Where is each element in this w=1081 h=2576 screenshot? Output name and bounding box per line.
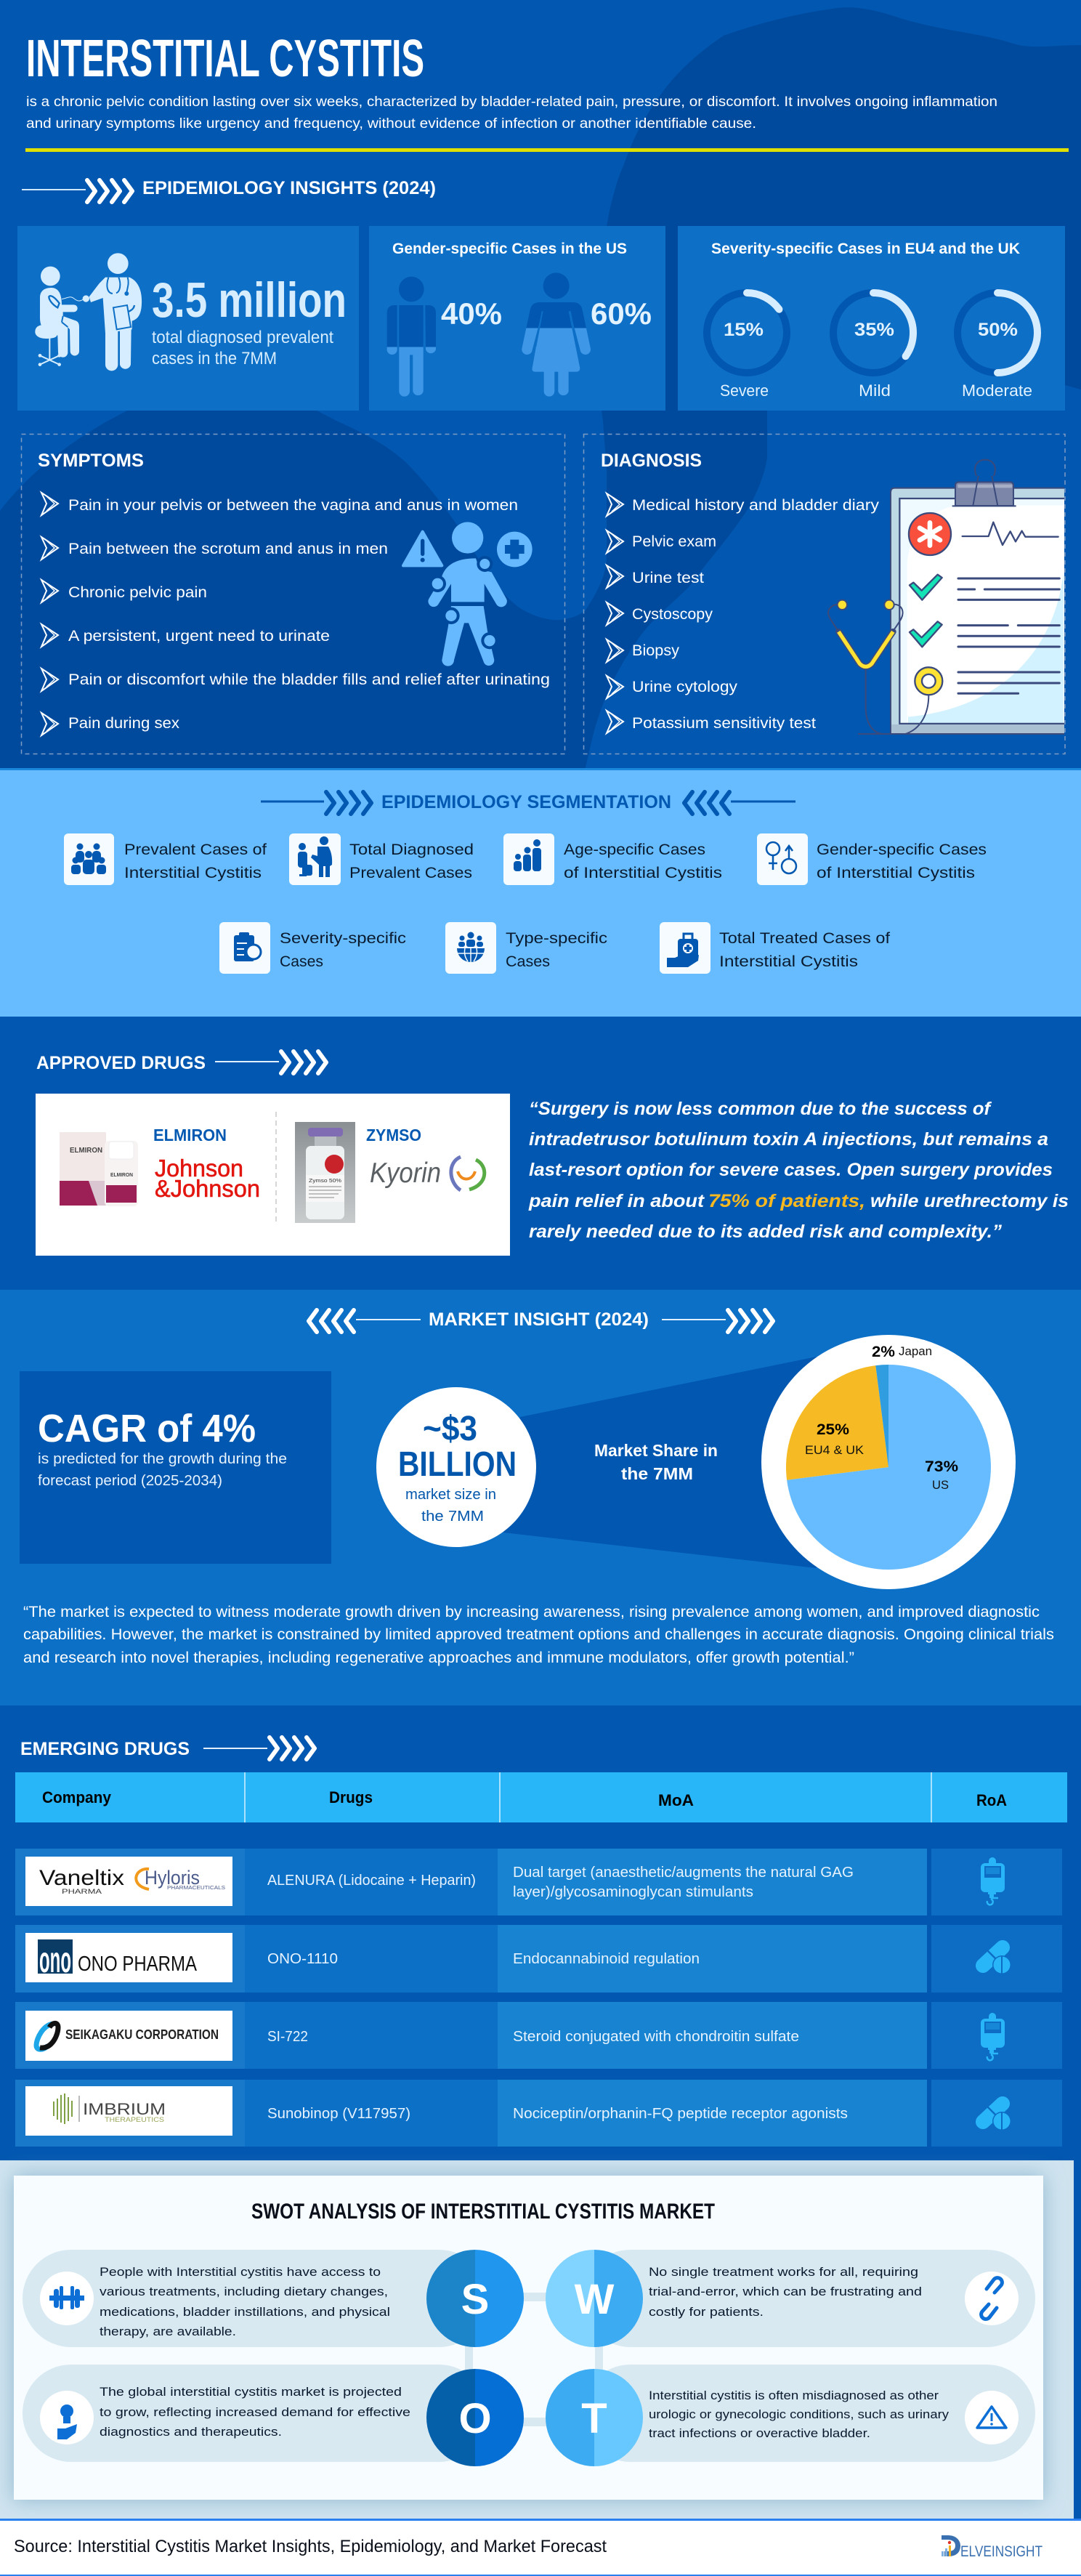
icon: pills [983,2104,1011,2131]
heading: SWOT: SWOT ANALYSIS OF INTERSTITIAL CYSTITIS MARKET [251,2200,715,2224]
strengths: medications, bladder instillations, and physical [100,2305,390,2319]
icon: IV bag [981,2013,1005,2060]
ring chart: severe [707,293,787,400]
panel: approved drugs [36,1094,510,1256]
table row: SI-722: SI-722 [267,2029,308,2045]
weaknesses: No single treatment works for all, requiring [649,2265,918,2279]
quote: surgery: 75% of patients, [708,1191,865,1211]
weaknesses [546,2250,1035,2347]
panel: diagnosis [584,435,1065,754]
opportunities: diagnostics and therapeutics. [100,2425,282,2439]
icon: pills [983,1947,1011,1974]
diagnosis list: Cystoscopy [632,606,713,623]
logo: Seikagaku [25,2011,232,2061]
image: Elmiron pack: ELMIRON [110,1173,133,1178]
market commentary: capabilities. However, the market is constrained by limited approved treatment options and challenges in accurate diagnosis. Ongoing clinical trials [23,1626,1054,1643]
logo: Vaneltix and Hyloris: PHARMACEUTICALS [167,1886,225,1891]
pie chart: market share: 73% [925,1458,958,1475]
item: gender-specific cases [757,833,987,885]
ring chart: moderate: 50% [978,320,1018,340]
icon: clipboard and stethoscope [828,460,1064,734]
heading: emerging drugs: EMERGING DRUGS [20,1739,190,1759]
intro text: is a chronic pelvic condition lasting over six weeks, characterized by bladder-related pain, pressure, or discomfort. It involves ongoing inflammation [26,94,997,110]
table row: SI-722: Steroid conjugated with chondroitin sulfate [513,2029,799,2045]
item: severity-specific cases: Severity-specific [280,930,406,947]
stat caption [152,328,333,368]
market size circle: market size in [405,1487,496,1503]
ring chart: mild: Mild [859,381,891,400]
item: age-specific cases [503,833,722,885]
table row: ONO-1110: ONO-1110 [267,1951,338,1967]
source: Source: Interstitial Cystitis Market Insights, Epidemiology, and Market Forecast [14,2537,607,2556]
ring chart: moderate [957,293,1037,400]
stat: 3.5 million: 3.5 million [152,272,347,328]
image: Elmiron pack [60,1132,138,1206]
threats: tract infections or overactive bladder. [649,2426,870,2440]
heading: diagnosis: DIAGNOSIS [601,451,702,471]
symptom list: Pain between the scrotum and anus in men [68,541,388,557]
strengths: therapy, are available. [100,2325,236,2338]
quote: surgery: rarely needed due to its added risk and complexity.” [529,1222,1003,1242]
market size circle: the 7MM [421,1509,484,1525]
icon: person in pain [403,522,533,666]
table row: ONO-1110 [15,1925,1062,1992]
panel: severity-specific cases [678,226,1065,411]
heading: epidemiology segmentation: EPIDEMIOLOGY SEGMENTATION [381,792,671,812]
logo: Vaneltix and Hyloris: PHARMA [62,1888,102,1895]
market commentary: and research into novel therapies, including regenerative approaches and immune modulators, offer growth potential.” [23,1650,854,1666]
strengths [23,2250,524,2347]
stat caption: cases in the 7MM [152,349,277,368]
threats: Interstitial cystitis is often misdiagnosed as other [649,2389,939,2402]
image: Elmiron pack: ELMIRON [70,1147,102,1155]
logo: Vaneltix and Hyloris: Vaneltix [39,1866,124,1890]
item: age-specific cases: of Interstitial Cystitis [564,865,722,881]
table row: Alenura: layer)/glycosaminoglycan stimulants [513,1884,753,1900]
table row: Alenura [15,1849,1062,1915]
pie chart: market share: 25% [817,1421,849,1438]
strengths: S [461,2276,489,2323]
market size circle: ~$3 [423,1410,477,1448]
logo: Imbrium [25,2086,232,2136]
item: total diagnosed prevalent cases [289,833,474,885]
diagnosis list: Biopsy [632,642,680,659]
symptom list: Pain during sex [68,715,180,732]
stat: 40 percent: 40% [441,296,502,331]
item: total diagnosed prevalent cases: Prevalent Cases [349,865,472,881]
table row: Alenura: Dual target (anaesthetic/augments the natural GAG [513,1865,854,1881]
ring chart: moderate: Moderate [962,381,1032,400]
pie chart: market share: EU4 & UK [805,1443,865,1457]
threats [546,2365,1035,2466]
label: market share: the 7MM [621,1464,693,1483]
icon: IV bag [981,1857,1005,1905]
item: total treated cases [660,922,890,974]
logo: Ono Pharma: ONO PHARMA [78,1953,198,1976]
logo: Ono Pharma: ono [39,1939,71,1980]
item: type-specific cases: Type-specific [506,930,607,947]
panel: symptoms [22,435,565,754]
panel: market insight [0,1290,1081,1705]
image: Zymso vial [295,1122,355,1223]
logo: Kyorin: Kyorin [370,1158,441,1189]
panel: SWOT analysis [0,2160,1074,2519]
symptom list [41,493,550,735]
quote: surgery: “Surgery is now less common due to the success of [529,1099,992,1119]
panel: CAGR: CAGR of 4% [38,1407,256,1450]
market commentary: “The market is expected to witness moderate growth driven by increasing awareness, rising prevalence among women, and improved diagnostic [23,1604,1040,1620]
stat caption: total diagnosed prevalent [152,328,333,347]
panel heading: Severity-specific Cases in EU4 and the UK [711,241,1020,257]
market size circle: BILLION [398,1445,517,1484]
item: type-specific cases: Cases [506,953,550,970]
quote: surgery: last-resort option for severe cases. Open surgery provides [529,1160,1053,1180]
logo: Vaneltix and Hyloris [25,1857,232,1906]
item: age-specific cases: Age-specific Cases [564,841,705,858]
table header: MoA [658,1791,694,1809]
pie chart: market share [761,1335,1016,1589]
opportunities [23,2365,524,2466]
pie chart: market share: Japan [899,1344,932,1358]
panel: epidemiology segmentation [0,768,1081,1017]
diagnosis list: Potassium sensitivity test [632,715,816,732]
icon: woman [522,272,591,397]
item: type-specific cases [445,922,607,974]
diagnosis list: Pelvic exam [632,533,716,550]
item: total treated cases: Interstitial Cystitis [719,953,858,970]
table header: Drugs [329,1788,373,1806]
heading: approved drugs: APPROVED DRUGS [36,1053,206,1073]
panel: CAGR: forecast period (2025-2034) [38,1473,222,1489]
opportunities: O [458,2395,492,2442]
symptom list: Chronic pelvic pain [68,584,207,601]
intro text: and urinary symptoms like urgency and frequency, without evidence of infection or another identifiable cause. [26,116,756,132]
ring chart: mild: 35% [854,320,894,340]
item: total treated cases: Total Treated Cases of [719,930,890,947]
icon: man [387,277,436,397]
logo: Kyorin [370,1157,485,1190]
logo: DelveInsight [942,2535,1042,2560]
quote: surgery: pain relief in about [528,1191,705,1211]
ring chart: severe: Severe [720,381,769,400]
label: market share: Market Share in [594,1441,718,1460]
weaknesses: W [575,2276,615,2323]
heading: epidemiology insights: EPIDEMIOLOGY INSIGHTS (2024) [142,178,436,198]
logo: Imbrium: IMBRIUM [83,2100,166,2118]
table header: RoA [976,1791,1007,1809]
opportunities: to grow, reflecting increased demand for effective [100,2405,410,2419]
icon: doctor and patient [35,253,142,371]
market commentary [23,1604,1054,1666]
heading: epidemiology insights [22,178,436,202]
symptom list: Pain in your pelvis or between the vagina and anus in women [68,497,518,514]
cone connector [503,1357,817,1568]
logo: Imbrium: THERAPEUTICS [105,2116,164,2123]
logo: Johnson and Johnson: &Johnson [155,1175,260,1202]
weaknesses: costly for patients. [649,2305,764,2319]
ring chart: mild [833,293,913,400]
item: prevalent cases [64,833,267,885]
table header [15,1772,1067,1822]
market size circle [376,1387,536,1547]
diagnosis list [607,493,880,733]
quote: surgery: while urethrectomy is [870,1191,1069,1211]
threats: urologic or gynecologic conditions, such as urinary [649,2407,950,2421]
opportunities: The global interstitial cystitis market is projected [100,2385,402,2399]
pie chart: market share: 2% [872,1344,895,1360]
quote: surgery: intradetrusor botulinum toxin A injections, but remains a [529,1129,1048,1150]
logo: Johnson and Johnson [155,1155,260,1202]
panel: total diagnosed prevalent cases [17,226,359,411]
item: severity-specific cases [219,922,406,974]
panel: CAGR [20,1371,331,1564]
diagnosis list: Medical history and bladder diary [632,497,880,514]
logo: DelveInsight: ELVEINSIGHT [960,2543,1042,2560]
ring chart: severe: 15% [724,320,764,340]
footer [0,2519,1081,2576]
title: INTERSTITIAL CYSTITIS [26,30,424,88]
heading: market insight [309,1309,773,1332]
logo: Johnson and Johnson: Johnson [155,1155,243,1182]
table row: Alenura: ALENURA (Lidocaine + Heparin) [267,1873,476,1889]
table row: SI-722 [15,2002,1062,2069]
heading: emerging drugs [20,1737,315,1759]
pie chart: market share: US [932,1478,949,1492]
diagnosis list: Urine test [632,570,704,586]
label: Elmiron: ELMIRON [153,1126,227,1144]
heading: market insight: MARKET INSIGHT (2024) [429,1309,649,1330]
table row: Sunobinop [15,2080,1062,2147]
item: prevalent cases: Prevalent Cases of [124,841,267,858]
panel: CAGR: is predicted for the growth during the [38,1451,287,1467]
item: gender-specific cases: of Interstitial Cystitis [817,865,975,881]
strengths: various treatments, including dietary changes, [100,2285,388,2298]
stat: 60 percent: 60% [591,296,652,331]
table row: ONO-1110: Endocannabinoid regulation [513,1951,700,1967]
background blob shape [0,7,1081,770]
label: market share [594,1441,718,1483]
label: Zymso: ZYMSO [366,1126,421,1144]
image: Zymso vial: Zymso 50% [309,1179,341,1184]
diagnosis list: Urine cytology [632,679,738,695]
logo: Seikagaku: SEIKAGAKU CORPORATION [65,2027,219,2042]
symptom list: A persistent, urgent need to urinate [68,628,330,645]
quote: surgery [528,1099,1069,1242]
threats: T [581,2395,607,2442]
table row: Sunobinop: Nociceptin/orphanin-FQ peptide receptor agonists [513,2106,848,2122]
item: gender-specific cases: Gender-specific Cases [817,841,987,858]
heading: epidemiology segmentation [261,792,795,814]
heading: symptoms: SYMPTOMS [38,451,144,471]
item: severity-specific cases: Cases [280,953,323,970]
logo: Vaneltix and Hyloris: Hyloris [145,1867,200,1889]
item: prevalent cases: Interstitial Cystitis [124,865,262,881]
intro text [26,94,997,132]
heading: approved drugs [36,1051,326,1073]
logo: Ono Pharma [25,1933,232,1982]
strengths: People with Interstitial cystitis have access to [100,2265,381,2279]
panel heading: Gender-specific Cases in the US [392,241,627,257]
panel: gender-specific cases [369,226,665,411]
symptom list: Pain or discomfort while the bladder fills and relief after urinating [68,671,550,688]
item: total diagnosed prevalent cases: Total Diagnosed [349,841,474,858]
weaknesses: trial-and-error, which can be frustrating and [649,2285,922,2298]
table header: Company [42,1788,112,1806]
table row: Sunobinop: Sunobinop (V117957) [267,2106,410,2122]
